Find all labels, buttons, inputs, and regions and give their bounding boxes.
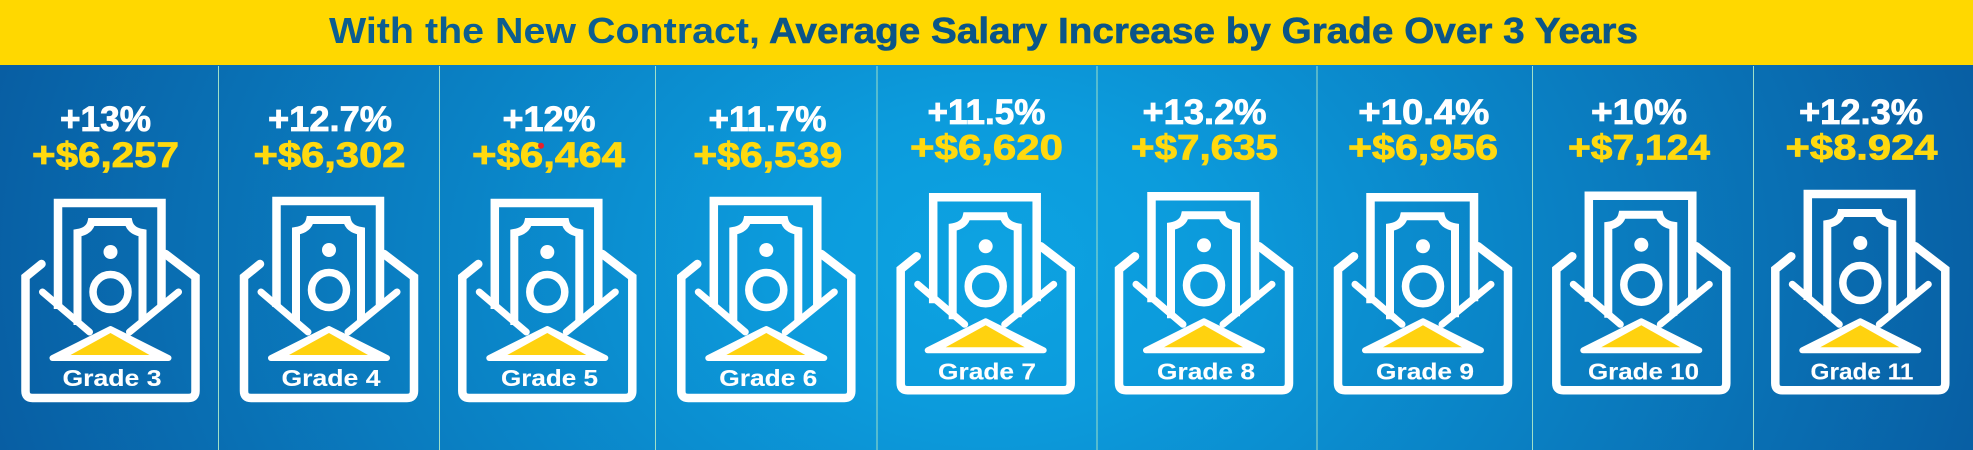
amount: +$6,302 — [254, 136, 406, 175]
panel: Grade 3 — [26, 100, 196, 398]
amount: +$6,257 — [32, 136, 179, 175]
grade label: Grade 10 — [1588, 358, 1699, 384]
grade label: Grade 9 — [1376, 358, 1474, 384]
percentage: +13% — [60, 100, 151, 139]
amount: +$7,635 — [1131, 128, 1278, 167]
panel: Grade 9 — [1338, 93, 1508, 390]
percentage: +10% — [1591, 93, 1687, 132]
panel: Grade 8 — [1119, 93, 1289, 390]
panel: Grade 5 — [462, 100, 632, 398]
icon: envelope with cash — [901, 197, 1071, 390]
percentage: +12.7% — [268, 100, 392, 139]
percentage: +13.2% — [1142, 93, 1266, 132]
grade label: Grade 11 — [1810, 358, 1914, 384]
percentage: +11.5% — [928, 93, 1046, 132]
percentage: +11.7% — [708, 100, 826, 139]
amount: +$6,539 — [693, 136, 842, 175]
grade label: Grade 4 — [282, 365, 381, 391]
grade label: Grade 7 — [938, 358, 1036, 384]
grade label: Grade 6 — [719, 365, 817, 391]
amount: +$8.924 — [1786, 128, 1938, 167]
panel: Grade 7 — [901, 93, 1071, 390]
title — [329, 10, 1638, 51]
percentage: +12.3% — [1799, 93, 1923, 132]
grade label: Grade 5 — [501, 365, 598, 391]
percentage: +10.4% — [1358, 93, 1489, 132]
panel: Grade 10 — [1556, 93, 1726, 390]
icon: envelope with cash — [244, 201, 414, 398]
icon: envelope with cash — [1775, 194, 1945, 390]
percentage: +12% — [502, 100, 596, 139]
icon: envelope with cash — [462, 203, 632, 398]
title banner — [0, 0, 1973, 65]
amount: +$6,464 — [472, 136, 626, 175]
red speck — [538, 143, 544, 149]
icon: envelope with cash — [1556, 196, 1726, 390]
icon: envelope with cash — [26, 203, 196, 398]
amount: +$7,124 — [1568, 128, 1711, 167]
amount: +$6,956 — [1348, 128, 1498, 167]
icon: envelope with cash — [1338, 197, 1508, 390]
grade label: Grade 3 — [62, 365, 162, 391]
amount: +$6,620 — [910, 128, 1063, 167]
title: Average Salary Increase by Grade Over 3 Years — [769, 10, 1638, 51]
panel: Grade 4 — [244, 100, 414, 398]
panel: Grade 6 — [681, 100, 851, 398]
title: With the New Contract, — [329, 10, 760, 51]
icon: envelope with cash — [1119, 196, 1289, 390]
grade label: Grade 8 — [1157, 358, 1255, 384]
icon: envelope with cash — [681, 201, 851, 398]
panel: Grade 11 — [1775, 93, 1945, 390]
